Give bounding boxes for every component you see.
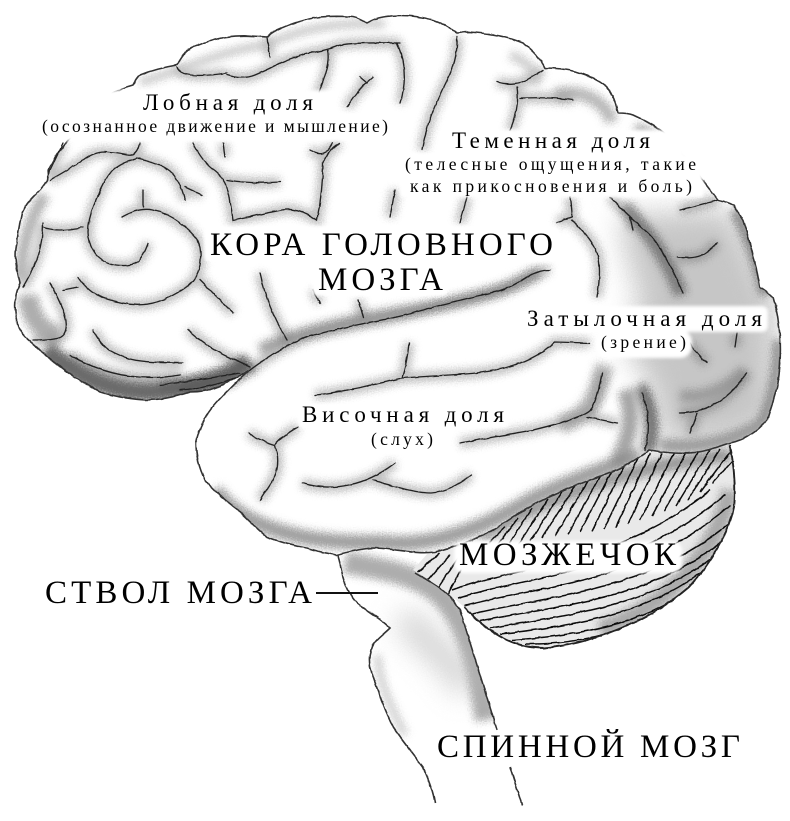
cerebrum and temporal lobe xyxy=(15,16,780,555)
sulci xyxy=(23,37,747,500)
label: frontal lobe: Лобная доля xyxy=(143,90,313,115)
label: temporal lobe xyxy=(302,402,504,449)
outer contour xyxy=(15,16,780,555)
cerebellum xyxy=(413,445,735,648)
label: parietal lobe xyxy=(405,128,696,196)
connector line: brain stem xyxy=(316,592,378,594)
label: cerebellum: МОЗЖЕЧОК xyxy=(459,537,677,573)
label: frontal lobe xyxy=(42,90,388,136)
label: temporal lobe: (слух) xyxy=(371,429,433,449)
label: frontal lobe: (осознанное движение и мышление) xyxy=(42,116,388,136)
label: occipital lobe: Затылочная доля xyxy=(527,306,762,331)
label: cerebral cortex: КОРА ГОЛОВНОГО xyxy=(210,227,553,263)
label: cerebral cortex xyxy=(210,227,553,298)
label: brain stem: СТВОЛ МОЗГА xyxy=(45,575,312,611)
label: cerebral cortex: МОЗГА xyxy=(318,262,443,298)
shading xyxy=(20,24,778,543)
label: occipital lobe: (зрение) xyxy=(601,332,686,352)
label: parietal lobe: Теменная доля xyxy=(452,128,650,153)
label: parietal lobe: как прикосновения и боль) xyxy=(410,176,692,196)
hatch: folia xyxy=(418,449,733,648)
label: spinal cord: СПИННОЙ МОЗГ xyxy=(437,728,740,765)
label backgrounds xyxy=(36,90,768,573)
label: temporal lobe: Височная доля xyxy=(302,402,504,427)
label: occipital lobe xyxy=(527,306,762,352)
brain stem and spinal cord xyxy=(338,540,522,805)
label: parietal lobe: (телесные ощущения, такие xyxy=(405,154,696,174)
